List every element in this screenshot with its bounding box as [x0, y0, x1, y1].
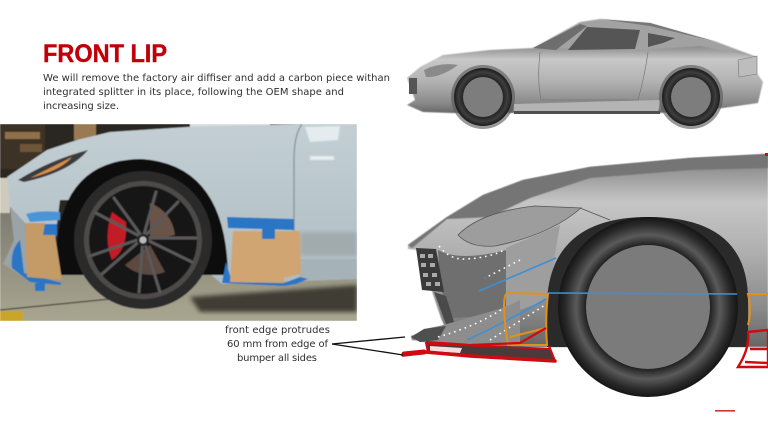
callout text: bumper all sides — [237, 353, 317, 364]
large bonnet panel — [408, 154, 768, 248]
photo spokes — [90, 192, 196, 292]
large splitter top — [412, 300, 520, 345]
blue guide lines — [467, 258, 737, 340]
orange outline: left section — [504, 293, 548, 345]
photo tyre — [74, 171, 212, 309]
side door lines — [539, 52, 648, 100]
orange outline: right section — [748, 294, 768, 325]
callout arrows — [332, 337, 405, 355]
side view car — [407, 19, 763, 129]
enlarged front car drawing — [403, 153, 768, 412]
side car greenhouse — [533, 19, 757, 60]
white dotted edge lines — [438, 246, 545, 340]
callout text: 60 mm from edge of — [227, 339, 328, 350]
side headlight — [424, 64, 458, 77]
photo front bumper — [3, 207, 28, 280]
intro text block: We will remove the factory air diffiser and add a carbon piece withan — [43, 73, 390, 84]
red mark top right — [765, 153, 768, 156]
photo left cardboard — [25, 223, 62, 280]
red sketch right of wheel — [738, 330, 768, 367]
side front wheel — [454, 68, 512, 126]
large headlight crease — [580, 208, 610, 220]
large hub — [586, 245, 710, 369]
red dash — [715, 410, 735, 412]
callout text: front edge protrudes — [225, 325, 330, 336]
large wheel arch — [547, 217, 748, 347]
callout text — [225, 325, 330, 364]
side rear wheel — [662, 68, 720, 126]
large headlight — [458, 206, 581, 246]
photo wheel arch — [56, 159, 228, 275]
photo car body — [7, 124, 357, 284]
intro text block: integrated splitter in its place, following the OEM shape and — [43, 87, 344, 98]
side car side skirt — [514, 100, 660, 114]
side windows — [568, 27, 640, 50]
photo blue tape — [12, 211, 308, 291]
side grille — [409, 78, 417, 94]
photo: taped cardboard mock-up on front wheel area — [0, 124, 357, 321]
large bumper shadow — [438, 250, 506, 318]
red splitter sketch — [403, 328, 555, 361]
large tyre — [558, 217, 738, 397]
side car body — [407, 46, 763, 113]
side wheel arches — [451, 65, 515, 129]
large car body — [408, 154, 768, 347]
intro text block: increasing size. — [43, 101, 119, 112]
photo headlight — [18, 150, 88, 182]
photo right cardboard — [230, 231, 301, 283]
intro text block — [43, 73, 390, 112]
photo background: workshop shelves — [0, 124, 270, 216]
photo brake disc and caliper — [150, 203, 175, 240]
side tail light — [738, 56, 757, 77]
title: FRONT LIP — [43, 40, 167, 68]
large grille — [416, 248, 454, 324]
photo floor — [0, 213, 357, 321]
